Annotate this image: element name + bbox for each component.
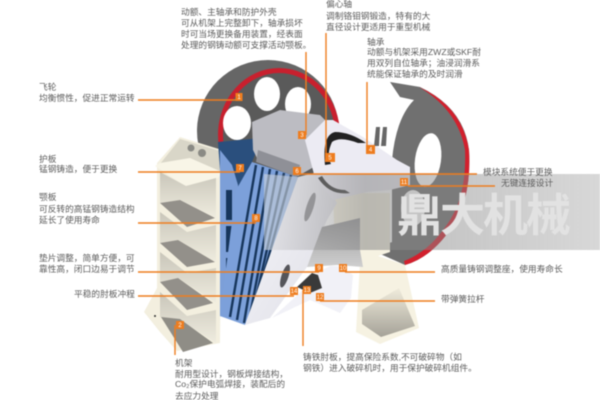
text: guard plate (39, 153, 118, 174)
text: jaw plate (39, 191, 135, 225)
number badges: 2 (178, 323, 182, 329)
text: bearing (367, 36, 481, 79)
number badges: 8 (254, 216, 258, 222)
text: frame (175, 357, 288, 400)
text: frame: 耐用型设计，钢板焊接结构， (175, 368, 288, 379)
number badges: 6 (295, 169, 299, 175)
text: module system (483, 166, 553, 188)
text: frame bearing housing: 处理的钢铸动额可支撑活动颚板。 (181, 39, 311, 50)
leader lines (138, 33, 495, 355)
text: flywheel: 均衡惯性，促进正常运转 (39, 92, 135, 103)
text: bearing: 统能保证轴承的及时润滑 (367, 68, 463, 79)
text: eccentric shaft: 直径设计更适用于重型机械 (326, 21, 431, 32)
text: cast iron toggle plate: 铸铁肘板，提高保险系数,不可破碎物（如 (303, 351, 462, 362)
text: frame: 机架 (175, 357, 193, 368)
right frame column (333, 193, 419, 344)
text: spring rod: 带弹簧拉杆 (441, 293, 485, 304)
number badges: 3 (300, 133, 304, 139)
swing jaw and eccentric body (245, 110, 410, 325)
text: frame bearing housing: 可从机架上完整卸下，轴承损坏 (181, 17, 303, 28)
number badges: 5 (328, 156, 332, 162)
text: flywheel (39, 81, 135, 103)
watermark brand name: 鼎大机械 (397, 190, 570, 241)
number badges: 4 (369, 148, 373, 154)
text: shim adjustment: 垫片调整，简单方便，可 (39, 252, 135, 263)
text: shim adjustment (39, 252, 135, 274)
text: module system: 模块系统便于更换 (483, 166, 553, 177)
text: adjusting seat: 高质量铸钢调整座，使用寿命长 (441, 263, 563, 274)
text: guard plate: 护板 (39, 153, 57, 164)
number badges: 12 (317, 295, 324, 301)
text: guard plate: 锰钢铸造，便于更换 (39, 163, 118, 174)
flywheel rear (197, 60, 340, 202)
text: toggle stroke: 平稳的肘板冲程 (74, 288, 135, 299)
text: bearing: 动额与机架采用ZWZ或SKF耐 (367, 46, 481, 57)
text: frame bearing housing: 动额、主轴承和防护外壳 (181, 6, 277, 17)
number badges: 13 (304, 288, 311, 294)
left frame with shelves (144, 137, 222, 352)
text: frame: Co₂保护电弧焊接，装配后的 (175, 378, 285, 389)
jaw plate: blue guard and grid (218, 138, 298, 325)
text: frame bearing housing (181, 6, 311, 50)
number badges: 10 (340, 266, 347, 272)
text: module system: 无键连接设计 (501, 177, 553, 188)
text: frame bearing housing: 时可当场更换备用装置，经表面 (181, 28, 303, 39)
text: jaw plate: 延长了使用寿命 (39, 214, 100, 225)
number badges: 7 (238, 166, 242, 172)
text: jaw plate: 可反转的高锰钢铸造结构 (39, 203, 135, 214)
number badges: 11 (401, 180, 408, 186)
text: eccentric shaft: 调制铬钼钢锻造，特有的大 (326, 10, 431, 21)
text: jaw plate: 颚板 (39, 191, 57, 202)
number badges: 9 (317, 266, 321, 272)
text: flywheel: 飞轮 (39, 81, 57, 92)
text: bearing: 轴承 (367, 36, 385, 47)
text: eccentric shaft (326, 0, 431, 32)
number badges: 1 (237, 95, 241, 101)
gray watermark band (264, 174, 600, 250)
text: bearing: 用双列自位轴承；油浸润滑系 (367, 57, 480, 68)
text: cast iron toggle plate (303, 351, 477, 373)
flywheel front section (378, 82, 469, 265)
text: cast iron toggle plate: 钢铁）进入破碎机时，用于保护破碎机组件。 (303, 362, 477, 373)
number badges: 14 (291, 289, 298, 295)
text: shim adjustment: 靠性高，闭口边易于调节 (39, 263, 135, 274)
number badges (176, 93, 408, 329)
